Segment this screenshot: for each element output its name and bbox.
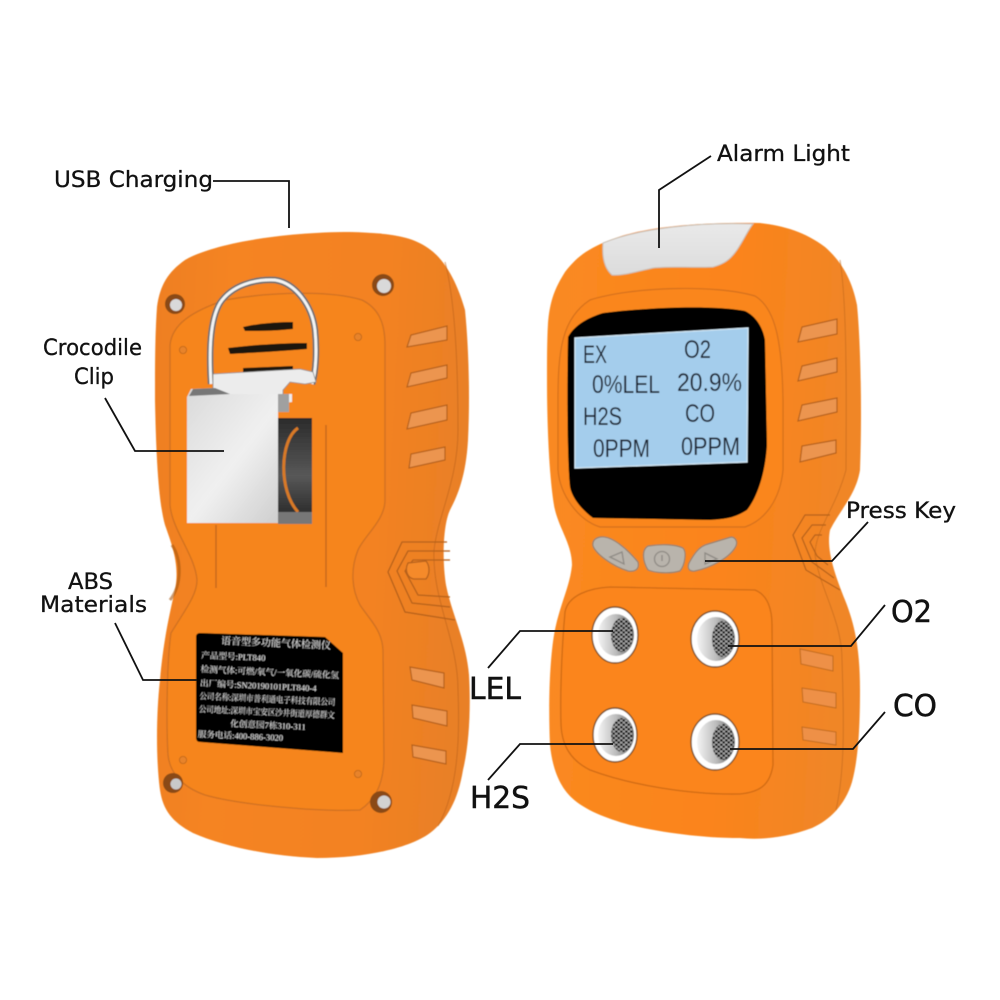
callout: ABS Materials: Materials [40,593,147,618]
callout: O2: O2 [891,595,932,630]
front body shell [547,223,861,839]
callout: LEL: LEL [469,672,521,707]
screws [163,274,394,813]
clip top plate [213,369,316,396]
LCD reading: O2: O2 [684,336,711,364]
label spec lines [198,649,340,745]
callout: Crocodile Clip [43,336,224,451]
callout: Press Key: Press Key [846,499,956,524]
LCD reading: CO: CO [685,400,715,428]
LCD reading: EX: EX [583,341,607,369]
label spec lines: 公司地址:深圳市宝安区沙井街道厚德群文 [199,703,335,720]
side seam [434,262,459,826]
LCD reading: H2S: H2S [583,403,622,431]
label spec lines: 检测气体:可燃/氧气/一氧化碳/硫化氢 [200,663,340,680]
black spec label [196,633,343,753]
press key buttons [593,537,737,573]
left waist grip [170,545,179,600]
D-ring hook [210,280,316,384]
battery cavity [278,418,312,523]
crocodile clip plate [187,388,292,523]
callout: H2S [470,744,613,816]
label spec lines: 出厂编号:SN20190101PLT840-4 [200,677,318,693]
callout: O2 [728,595,932,646]
display black bezel [567,307,767,520]
callout: USB Charging [54,168,289,228]
upper grip vents [798,319,837,462]
label spec lines: 产品型号:PLT840 [201,649,266,663]
callout: H2S: H2S [470,781,530,816]
callout: Crocodile Clip: Clip [74,365,114,390]
callout: LEL [469,631,613,707]
label spec lines: 服务电话:400-886-3020 [198,728,283,743]
callout: ABS Materials: ABS [68,570,113,595]
raised upper bezel [558,288,783,527]
callout: ABS Materials [40,570,197,680]
lower grip vents [410,667,447,764]
label spec lines: 公司名称:深圳市普利通电子科技有限公司 [199,690,336,707]
upper grip vents [407,326,447,468]
LCD reading: oxygen: 20.9% [677,369,742,397]
right device: front view [547,223,861,839]
lower grip vents [800,649,836,745]
side seam [815,260,846,810]
label spec lines: 化创意园7栋310-311 [230,717,306,732]
sensor LEL [592,607,638,663]
waist ribs [388,542,455,620]
callout: CO [730,689,937,749]
LCD reading: CO ppm: 0PPM [681,433,740,461]
sensor O2 [691,611,739,667]
speaker slots [228,322,307,372]
sensor H2S [593,708,637,762]
callout: USB Charging: USB Charging [54,168,213,193]
callout: Crocodile Clip: Crocodile [43,336,142,361]
alarm light window [603,224,753,275]
LCD screen [575,328,748,468]
callout: Alarm Light: Alarm Light [717,142,850,167]
left device: back view [155,232,470,858]
recessed back panel [167,293,385,810]
LCD reading: LEL: 0%LEL [592,371,660,399]
callout: Press Key [705,499,956,561]
LCD reading: H2S ppm: 0PPM [593,435,650,463]
button icons [610,552,624,564]
right waist ribs [793,515,840,590]
label title: 语音型多功能气体检测仪 [221,634,331,652]
sensor CO [691,714,739,770]
back body shell [155,232,470,858]
sensor panel [561,587,773,794]
inner channel lines [216,425,326,588]
moulded dots [179,333,362,778]
callout: Alarm Light [659,142,850,248]
callout: CO: CO [893,689,937,724]
